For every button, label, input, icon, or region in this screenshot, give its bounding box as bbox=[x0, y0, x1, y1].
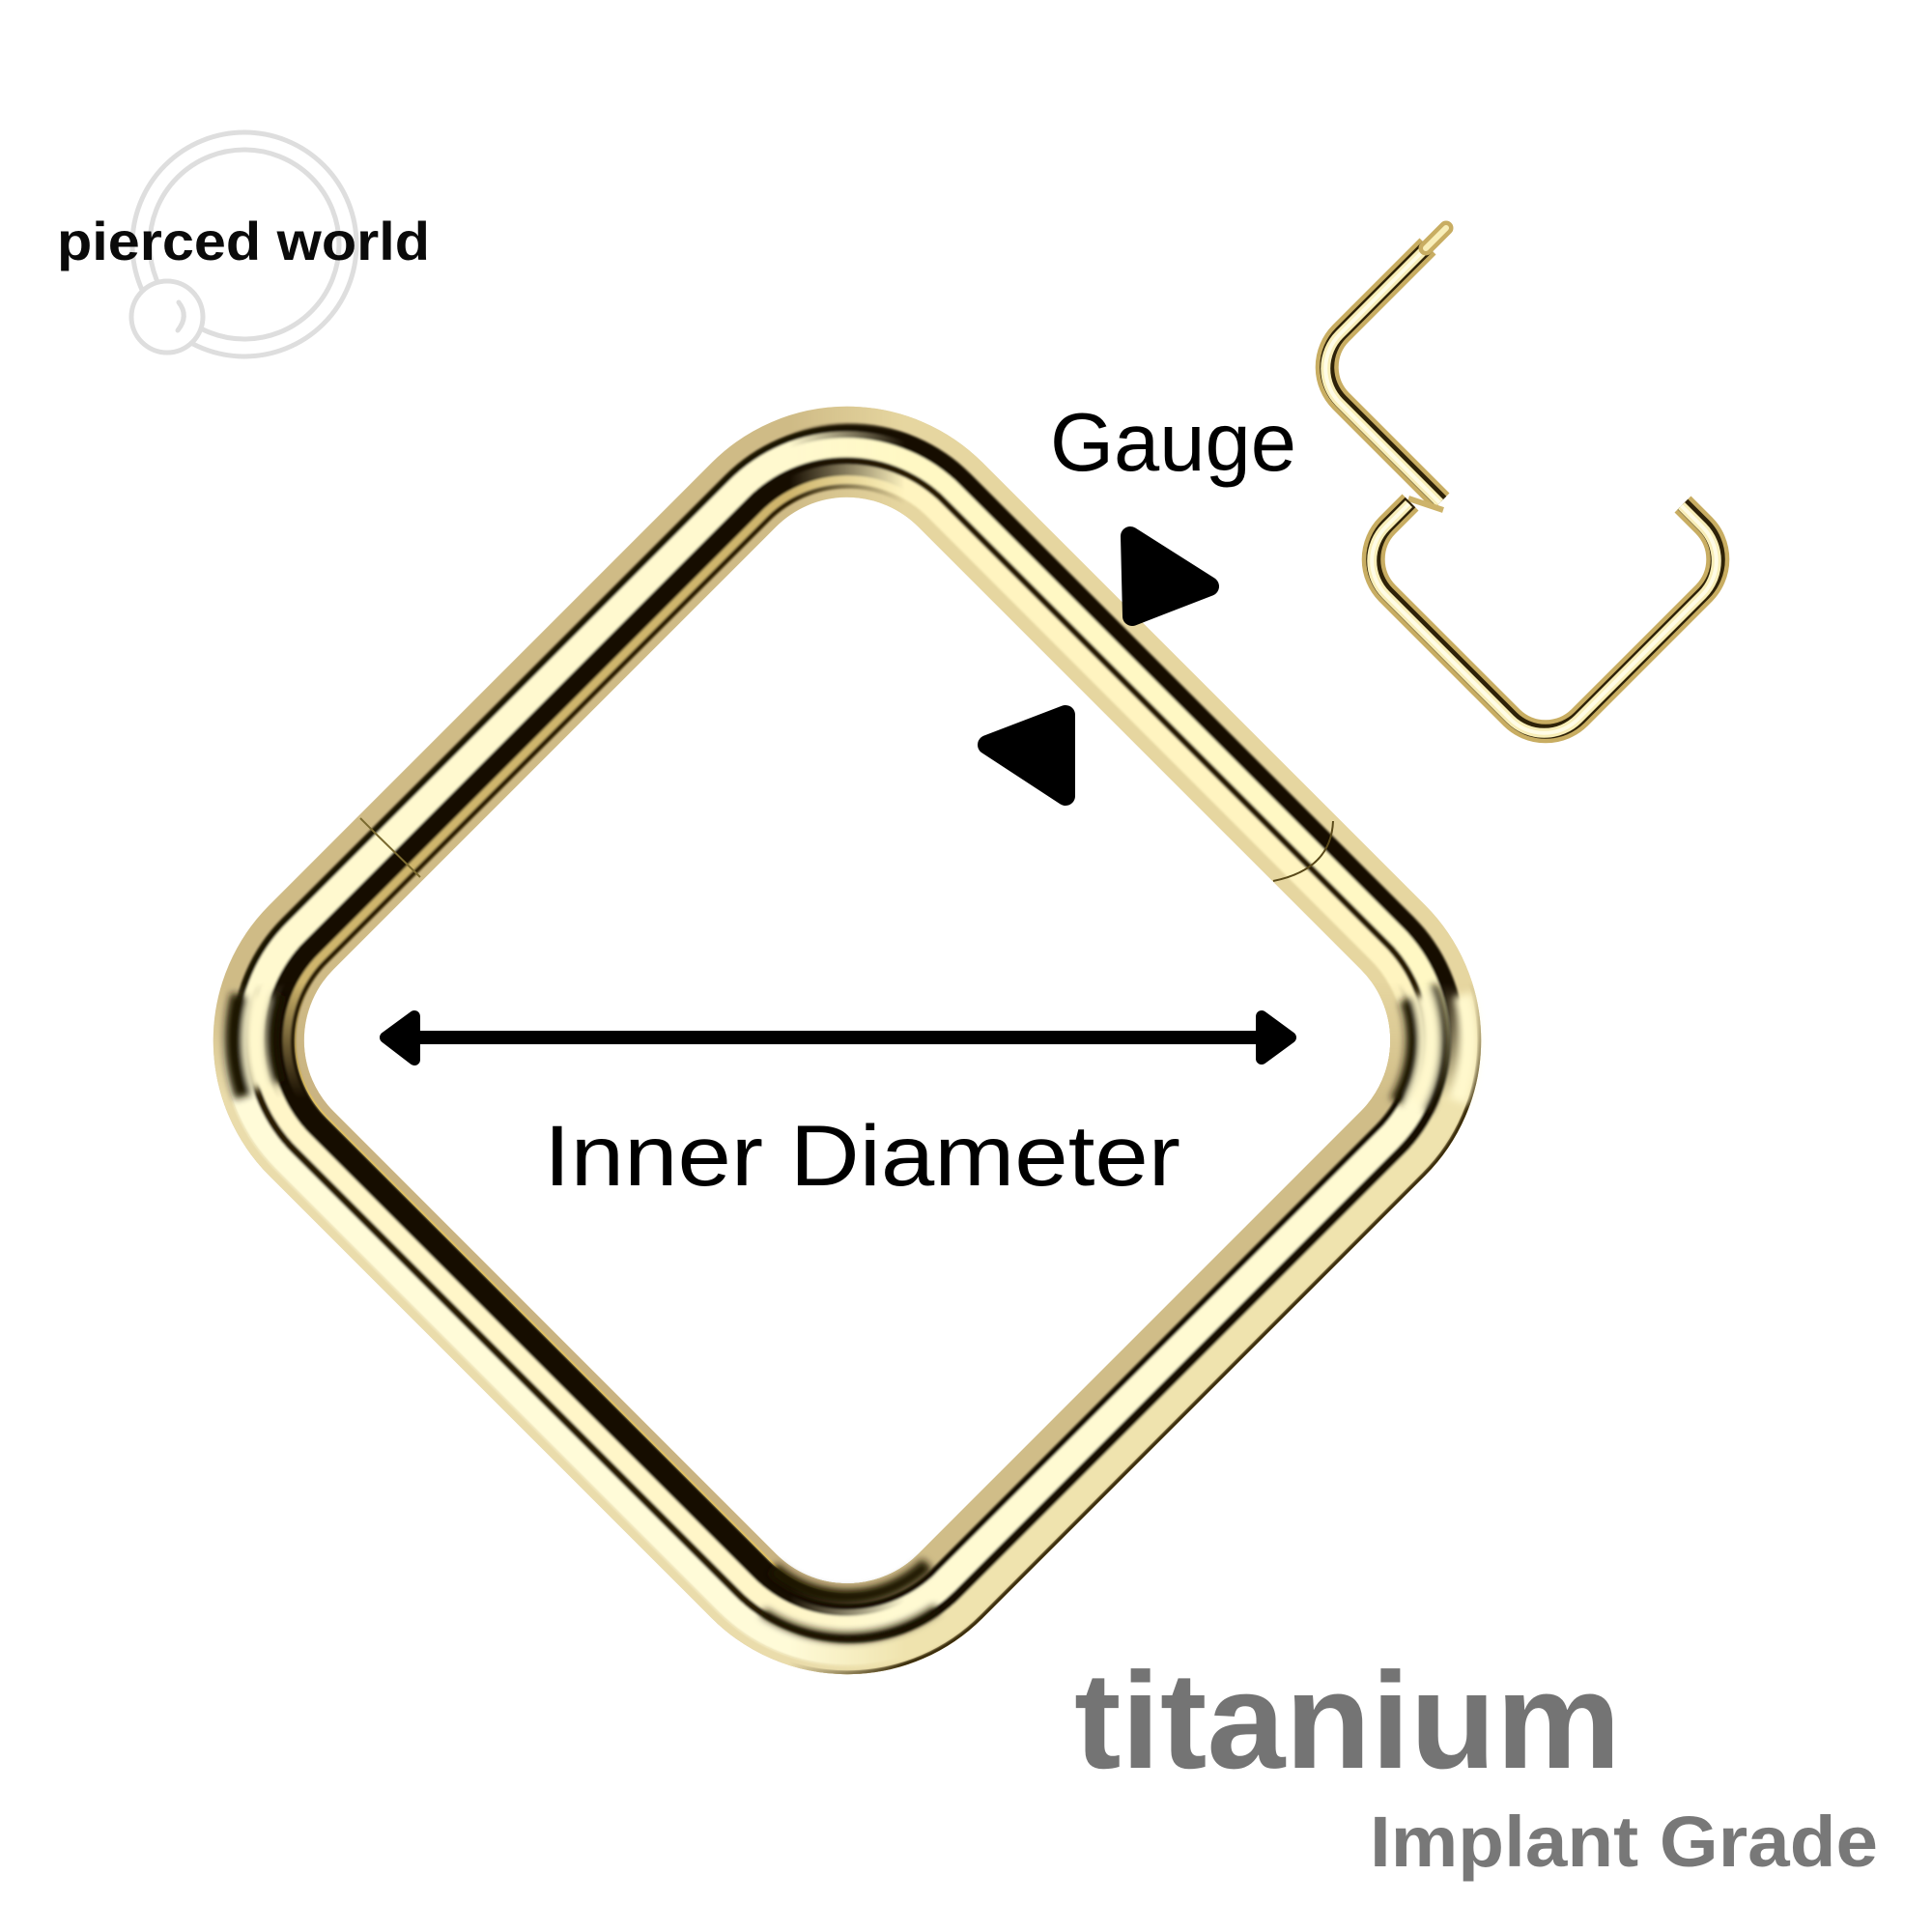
small open ring: hinge shown open bbox=[1325, 228, 1718, 733]
gauge label: Gauge bbox=[1050, 397, 1296, 489]
lower ring segment bbox=[1372, 502, 1718, 733]
hinge seam: left bbox=[360, 818, 420, 877]
logo wordmark: pierced world bbox=[57, 211, 430, 271]
gauge marker: upper triangle bbox=[1130, 536, 1209, 616]
double arrow: inner diameter bbox=[385, 1016, 1291, 1060]
icon: captive bead ring bbox=[131, 132, 356, 356]
inner diameter label: Inner Diameter bbox=[544, 1107, 1180, 1204]
logo: pierced world bbox=[57, 132, 430, 356]
material label: titanium: titanium bbox=[1074, 1644, 1621, 1798]
material grade label: Implant Grade bbox=[1370, 1802, 1878, 1882]
hinge seam: right bbox=[1273, 821, 1333, 881]
main gold square ring bbox=[213, 406, 1482, 1675]
corner reflections bbox=[234, 985, 1468, 1637]
hinge joint bbox=[1408, 498, 1443, 510]
upper hinged segment bbox=[1325, 228, 1446, 502]
gauge marker: lower triangle bbox=[987, 715, 1065, 796]
